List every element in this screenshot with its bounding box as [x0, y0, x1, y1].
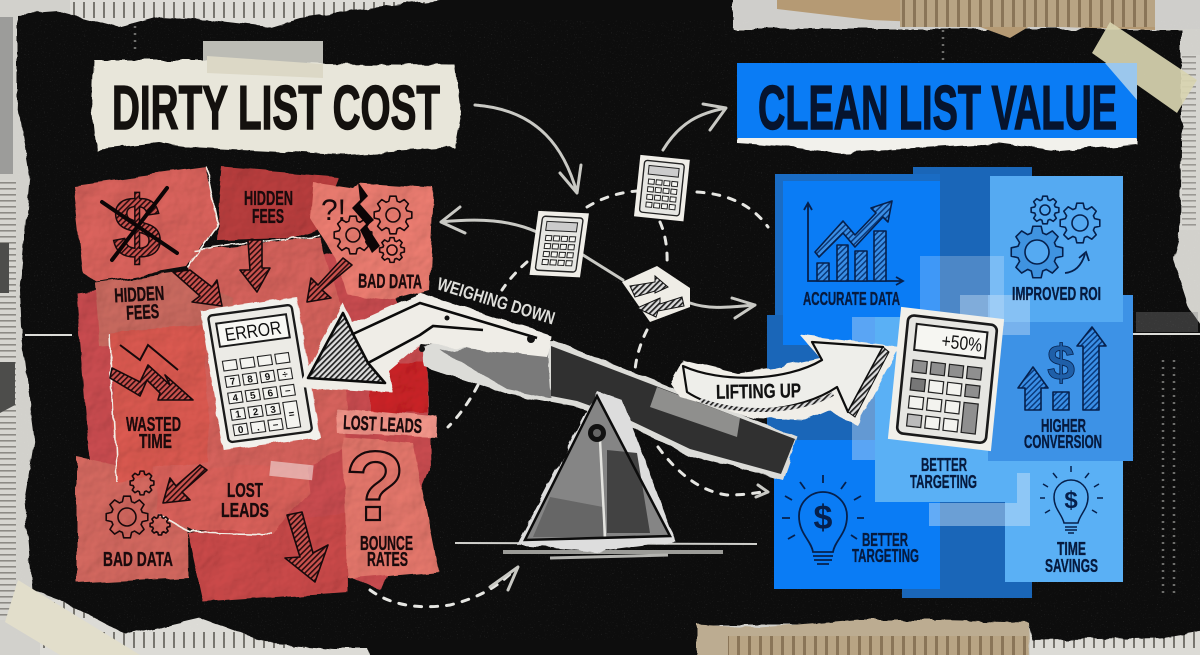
text: better targeting left: TARGETING: [852, 546, 919, 566]
icon: error calculator: 8: [247, 374, 254, 386]
title: dirty list cost: DIRTY LIST COST: [112, 74, 440, 143]
icon: error calculator: 3: [270, 404, 277, 416]
icon: bulb with dollar left: [782, 475, 864, 564]
grey picture blocks left: [0, 243, 15, 413]
label: weighing down: WEIGHING DOWN: [435, 274, 557, 328]
icon: gears improved roi: [1011, 196, 1100, 278]
text: hidden fees left: HIDDEN: [114, 283, 165, 307]
newspaper left column: [0, 180, 16, 620]
text: better targeting left: [852, 530, 919, 566]
newspaper bottom right strip: [1030, 632, 1200, 655]
tape on heading: [203, 41, 323, 71]
icon: crossed out dollar: [102, 178, 177, 277]
cardboard bottom: [697, 620, 1030, 655]
arrow: bad data to calculator: [307, 258, 352, 302]
arrow: wasted time down: [163, 465, 207, 503]
tape: bottom left corner: [5, 580, 140, 655]
text: lost leads tag: LOST LEADS: [343, 412, 423, 438]
seesaw beam: [420, 340, 798, 480]
icon: plus 50 percent calculator: +50%: [941, 331, 983, 357]
icon: error calculator: 1: [235, 409, 242, 421]
icon: small swap arrows sticker: [622, 266, 690, 322]
text: wasted time: TIME: [139, 431, 172, 453]
icon: error calculator: 9: [264, 372, 272, 383]
text: lost leads center: [221, 480, 269, 522]
chalk arrows and dashed paths: [370, 104, 768, 607]
arrow: weighing down: [298, 293, 550, 393]
icon: error calculator: =: [288, 409, 296, 420]
panel: dirty list red collage: [73, 167, 438, 602]
text: hidden fees top: FEES: [252, 206, 284, 228]
icon: error calculator: .: [256, 422, 261, 434]
text: bad data top: BAD DATA: [358, 270, 422, 294]
icon: broken gears with question marks: ?!: [321, 194, 346, 227]
icon: error calculator: 4: [232, 393, 240, 404]
text: bounce rates: RATES: [367, 549, 408, 571]
arrow: hidden fees down: [240, 240, 270, 292]
newspaper bottom strip: [40, 600, 380, 655]
icon: bar chart growth: [804, 201, 903, 285]
icon: error calculator: 7: [229, 376, 236, 388]
chalk fold lines: [25, 334, 1200, 335]
icon: bulb with dollar right: [1040, 466, 1103, 533]
icon: error calculator: −: [272, 420, 280, 432]
text: wasted time: WASTED: [126, 414, 181, 436]
text: bounce rates: [360, 533, 413, 571]
panel: clean list value heading: [737, 63, 1137, 153]
icon: error calculator: 2: [252, 407, 260, 418]
text: higher conversion: [1024, 416, 1102, 452]
text: better targeting center: TARGETING: [910, 472, 977, 492]
icon: falling zigzag arrow: [110, 345, 193, 400]
tape on lost leads: [269, 461, 314, 480]
icon: gears bottom left: [106, 471, 170, 538]
icon: plus 50 percent calculator: [888, 307, 1004, 451]
icon: error calculator: 6: [267, 388, 275, 400]
grey block left: [0, 17, 13, 174]
text: accurate data: ACCURATE DATA: [803, 289, 900, 309]
text: bounce rates: BOUNCE: [360, 533, 413, 555]
text: hidden fees left: [114, 283, 166, 325]
icon: question mark: ?: [345, 431, 405, 541]
icon: error calculator: [200, 297, 320, 450]
text: hidden fees top: HIDDEN: [244, 188, 293, 210]
text: hidden fees left: FEES: [126, 301, 160, 325]
icon: small calculator left: [529, 211, 589, 277]
icon: error calculator: ÷: [282, 369, 289, 381]
label: lifting up: LIFTING UP: [716, 380, 801, 404]
text: better targeting center: BETTER: [921, 455, 967, 475]
chalk dust streaks: [135, 26, 1174, 598]
icon: small calculator top: [634, 155, 690, 221]
text: higher conversion: HIGHER: [1041, 416, 1086, 436]
tape: top right corner: [1092, 22, 1197, 113]
icon: rising arrows and dollar: $: [1047, 335, 1075, 391]
tape on beam: [650, 387, 740, 437]
text: better targeting left: BETTER: [862, 530, 908, 550]
text: lost leads center: LOST: [227, 480, 263, 502]
icon: broken gears with question marks: [321, 182, 412, 262]
light grey paper top right: [733, 0, 1200, 29]
newspaper top left strip: [70, 0, 450, 32]
cardboard top right: [777, 0, 1155, 38]
icon: bulb with dollar left: $: [814, 499, 833, 537]
icon: error calculator: 5: [249, 390, 257, 402]
icon: error calculator: 0: [237, 425, 245, 436]
torn white edges: [110, 167, 320, 534]
icon: crossed out dollar: $: [113, 178, 161, 277]
arrow: lifting up: [670, 335, 900, 425]
arrow: hidden fees to calculator: [173, 270, 222, 306]
text: time savings: [1045, 539, 1098, 576]
text: hidden fees top: [244, 188, 293, 228]
newspaper right column: [1175, 55, 1200, 230]
text: lost leads center: LEADS: [221, 500, 269, 522]
text: time savings: SAVINGS: [1045, 556, 1098, 576]
text: better targeting center: [910, 455, 977, 492]
text: time savings: TIME: [1057, 539, 1086, 559]
text: wasted time: [126, 414, 181, 453]
icon: error calculator: −: [284, 386, 292, 397]
icon: error calculator: ERROR: [223, 317, 283, 345]
icon: bulb with dollar right: $: [1064, 487, 1078, 514]
icon: rising arrows and dollar: [1018, 327, 1106, 410]
panel: clean list blue collage: [767, 167, 1133, 598]
text: improved roi: IMPROVED ROI: [1012, 284, 1101, 304]
text: higher conversion: CONVERSION: [1024, 432, 1102, 452]
panel: dirty list cost heading: [92, 41, 461, 155]
seesaw triangle fulcrum: [517, 391, 676, 552]
arrow: bottom down: [285, 512, 328, 582]
text: bad data bottom: BAD DATA: [103, 549, 173, 571]
